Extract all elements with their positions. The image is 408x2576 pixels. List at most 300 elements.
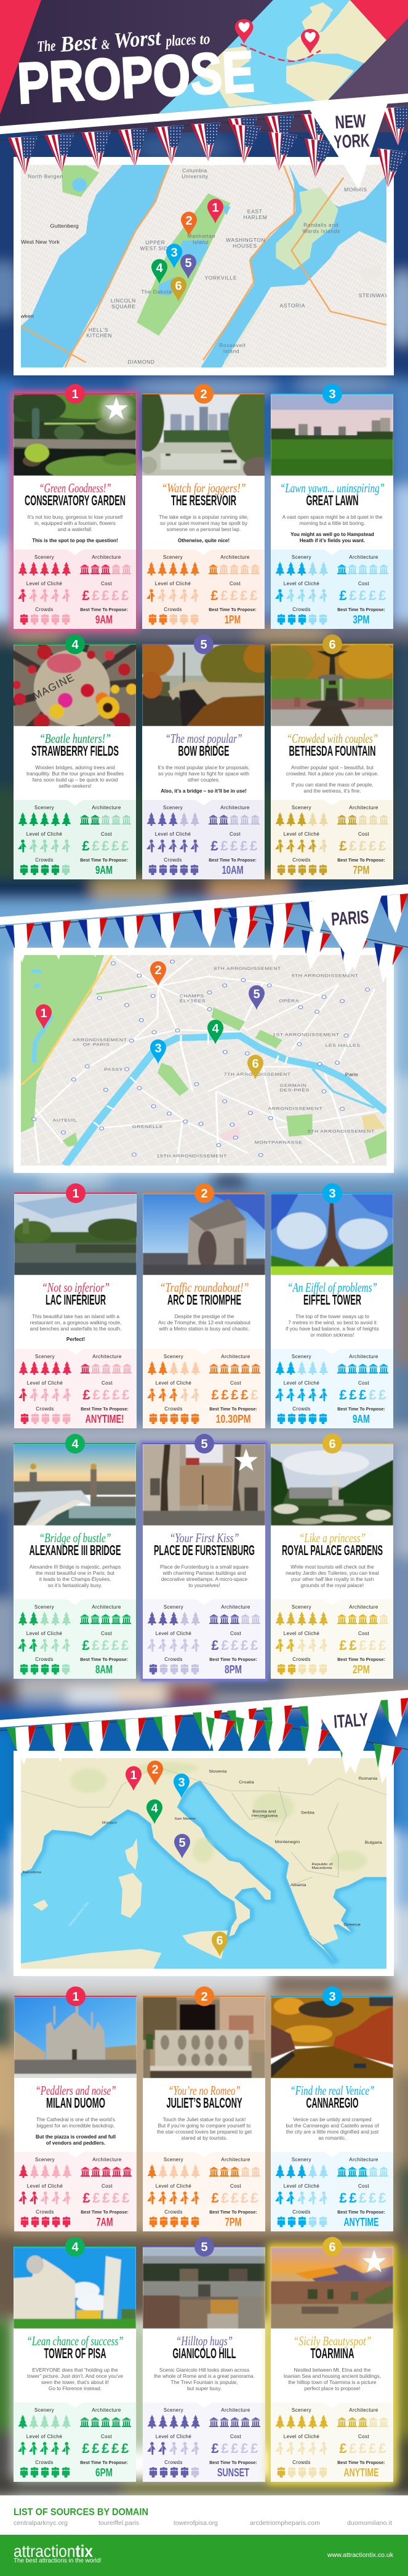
panel: new york map: Wards Islands [302,229,340,234]
badge 2: 2 [200,388,207,401]
stats panel: Cost [358,2183,369,2189]
stats panel: Cost [102,1380,113,1386]
stats panel: Crowds [36,2209,54,2215]
stats panel [142,550,265,629]
description: Ioanian Sea and housing ancient buildings, [284,2373,381,2379]
title: The [37,38,56,55]
stats panel: £££££ [210,588,260,603]
description: and the wetness, it’s fine. [303,788,361,794]
name: BOW BRIDGE [178,743,229,759]
stats panel: £££££ [339,588,388,603]
description: tower” picture. Just don’t. And once you’ve [27,2373,123,2379]
photo: juliets balcony [143,1997,265,2078]
highlight glow: new york card 1 [11,391,138,631]
description: Another popular spot – beautiful, but [291,764,374,770]
description: Go to Florence instead. [49,2385,102,2391]
stats panel: Crowds [292,1406,311,1412]
new york map pins: 3 [170,246,178,260]
stats panel: Best Time To Propose: [209,2460,257,2465]
title: PROPOSE [16,39,256,116]
stats panel: Cost [230,831,241,837]
panel: new york map: WASHINGTON [226,238,265,243]
description: in, equipped with a fountain, flowers [34,520,116,526]
panel: new york map: Roosevelt [219,343,246,348]
panel: new york map: Columbia [182,168,207,174]
quote: “Like a princess” [299,1530,366,1545]
header banner [0,0,408,132]
description: grounds of the royal palace! [301,1582,364,1588]
badge 2 [194,384,214,404]
name: STRAWBERRY FIELDS [31,743,119,759]
badge 5 [194,1434,214,1454]
highlight glow: paris card 5 [140,1441,268,1681]
stats panel: Best Time To Propose: [209,1657,257,1662]
stats panel: Best Time To Propose: [80,857,128,863]
italy map pins: 2 [151,1763,159,1777]
stats panel: Architecture [221,2407,250,2413]
description: fans soon build up – be quick to avoid [33,777,118,783]
stats panel: Best Time To Propose: [80,607,128,612]
stats panel [271,2152,393,2231]
panel: paris map: CHAMPS [180,994,204,998]
description: biggest for an incredible backdrop. [37,2122,114,2129]
name: ARC DE TRIOMPHE [167,1292,241,1308]
stats panel: Cost [101,581,112,586]
stats panel: Cost [230,581,241,586]
description: perfect place to propose! [304,2385,361,2391]
name: JULIET’S BALCONY [166,2095,242,2111]
quote: “An Eiffel of problems” [287,1280,377,1295]
pennant: italy: ITALY [333,1710,369,1732]
description: Venice can be untidy and cramped [293,2116,372,2122]
stats panel: Best Time To Propose: [337,2209,385,2215]
name: GREAT LAWN [306,492,358,508]
description: the hilltop town of Toarmina is a picture [288,2379,377,2385]
pennant: new york: YORK [334,130,370,153]
description: but super busy. [187,2385,222,2391]
stats panel: Architecture [221,1604,250,1610]
photo: gianicolo hill [143,2247,265,2329]
stats panel [271,800,393,879]
stats panel: £££££ [82,1638,131,1653]
stats panel: Scenery [34,2407,54,2413]
badge 1: 1 [72,1990,79,2004]
stats panel: £££££ [82,838,131,854]
name: MILAN DUOMO [46,2095,105,2111]
sources panel: LIST OF SOURCES BY DOMAIN [14,2507,148,2518]
stats panel: Architecture [92,1354,122,1359]
description: morning but a little bit boring. [300,520,365,526]
description: restaurant on, a gorgeous walking route, [30,1319,121,1326]
quote: “Lean chance of success” [27,2334,123,2348]
card: Gianicolo Hill [143,2237,265,2482]
panel: italy map: Monaco [102,1821,118,1825]
card: Bow Bridge [132,634,274,879]
paris map pins: 1 [40,1007,47,1020]
photo: toarmina [271,2247,393,2329]
stats panel: Crowds [164,857,182,863]
stats panel: Architecture [92,2407,121,2413]
description: Alexandre III Bridge is majestic, perhaps [30,1564,121,1570]
stats panel: Cost [230,2434,241,2439]
badge 3 [322,1986,342,2006]
description: seen the tower, that’s about it! [41,2379,109,2385]
stats panel: Best Time To Propose: [81,2209,129,2215]
stats panel: 9AM [95,614,113,626]
description: the star-crossed lovers be prepared to get [157,2129,252,2135]
stats panel [271,1599,393,1679]
stats panel [143,2402,265,2482]
new york map pins: 5 [185,257,192,270]
panel: italy map [14,1751,394,1976]
panel: new york map: Island [193,240,209,245]
italy map pins: 6 [216,1934,223,1948]
photo: reservoir [142,394,265,476]
stats panel: Scenery [35,2157,55,2162]
description: so it’s fantastically busy. [48,1582,102,1588]
paris map pins: 4 [212,1022,219,1036]
quote: “Sicily Beautyspot” [293,2334,372,2348]
stats panel [143,1599,265,1679]
badge 4 [65,2237,85,2257]
stats panel: ANYTIME [343,2466,379,2479]
badge 4 [65,1434,85,1454]
stats panel: Level of Cliché [284,581,319,586]
photo: bethesda fountain [271,645,393,726]
name: THE RESERVOIR [171,492,236,508]
description: If you can stand the mass of people, [291,782,374,788]
description: You might as well go to Hampstead [290,532,374,537]
description: The Cathedral is one of the world’s [36,2116,115,2122]
description: Arc de Triomphe, this 12-exit roundabout [158,1319,251,1326]
stats panel: Scenery [164,2407,183,2413]
badge 3 [322,384,342,404]
italy map pins: 5 [178,1836,186,1850]
description: or motion sickness! [310,1332,354,1338]
quote: “Green Goodness!” [39,481,111,495]
panel: paris map: 1ST ARRONDISSEMENT [273,1032,340,1037]
new york map pins: 2 [185,214,193,228]
new york map pins: 1 [212,201,219,215]
badge 5: 5 [201,2241,208,2254]
card: Bethesda Fountain [265,634,400,879]
photo: milan duomo [14,1997,137,2078]
panel: italy map: Romania [359,1777,377,1781]
stats panel: Crowds [292,2460,311,2465]
stats panel: Crowds [164,1406,183,1412]
panel: new york map: Guttenberg [50,223,79,229]
stats panel: Level of Cliché [27,2183,63,2189]
sources panel: towerofpisa.org [174,2519,218,2527]
description: of vendors and peddlers. [46,2140,105,2146]
photo: alexandre iii bridge [14,1444,136,1526]
stats panel: Level of Cliché [284,1380,319,1386]
photo: tower of pisa [14,2247,136,2329]
stats panel: Architecture [349,805,378,810]
title: Best [59,30,98,57]
stats panel: Best Time To Propose: [209,857,257,863]
stats panel: Crowds [164,2460,183,2465]
description: decorative streetlamps. A micro-space [161,1576,247,1582]
description: your other half like royalty in the lush [291,1576,374,1582]
stats panel [271,550,393,629]
badge 3: 3 [329,1187,336,1201]
name: ALEXANDRE III BRIDGE [30,1542,121,1558]
title: to [199,31,210,48]
description: Place de Furstenburg is a small square [160,1564,249,1570]
card: Conservatory Garden [10,384,143,629]
stats panel: Crowds [35,2460,54,2465]
description: as romantic. [318,2135,346,2141]
panel: paris map: 8TH ARRONDISSEMENT [214,966,281,971]
pennant: paris [312,894,382,970]
stats panel: Crowds [292,1657,311,1662]
stats panel: £££££ [211,2190,260,2206]
card: Strawberry Fields [7,634,143,879]
stats panel: 8PM [225,1663,242,1676]
description: Scenic Gianicolo Hill looks down across [159,2367,249,2373]
pennant: new york [310,103,388,190]
panel: new york map: University [182,174,209,179]
quote: “Bridge of bustle” [39,1530,111,1545]
description: if you have bad balance, a fear of heights [286,1326,379,1332]
name: PLACE DE FURSTENBURG [154,1542,255,1558]
card: Tower of Pisa [14,2237,136,2482]
description: tranquillity. But the tour groups and Beatles [26,770,124,777]
description: Also, it’s a bridge – so it’ll be in use! [161,788,247,794]
stats panel: 7PM [353,864,369,876]
badge 4: 4 [71,2241,79,2254]
white ribbon: paris [0,884,408,925]
pennant: italy [312,1697,382,1774]
panel: new york map: UPPER [145,240,165,246]
stats panel: £££££ [339,1387,388,1402]
stats panel: Architecture [220,554,250,560]
stats panel: Scenery [292,1354,311,1359]
stats panel: Level of Cliché [156,1380,191,1386]
description: The Trevi Fountain is popular, [170,2379,238,2385]
panel: paris map: GRENELLE [132,1124,163,1129]
stats panel: ANYTIME! [85,1413,124,1425]
stats panel: SUNSET [217,2466,249,2479]
stats panel: Architecture [349,554,378,560]
description: Perfect! [66,1337,85,1342]
panel: paris map: DES-PRÉS [280,1087,310,1092]
stats panel: Level of Cliché [26,1631,62,1636]
panel: new york map: LINCOLN [111,298,136,303]
stats panel: Scenery [34,1604,54,1610]
description: Heath if it’s fields you want. [300,538,365,543]
panel: paris map: GERMAIN [280,1083,307,1088]
highlight glow: italy card 6 [268,2244,396,2485]
stats panel: 9AM [95,864,113,876]
panel: new york map: YORKVILLE [204,276,237,281]
badge 1 [65,384,85,404]
badge 2: 2 [201,1990,208,2004]
quote: “Watch for joggers!” [161,481,246,495]
description: with charming Parisian buildings and [162,1570,246,1576]
badge 1: 1 [72,1187,79,1201]
card: Eiffel Tower [271,1183,393,1428]
panel: italy map: Republic of [312,1862,333,1866]
stats panel: Architecture [349,1604,378,1610]
stats panel: Crowds [35,607,54,612]
paris map pins: 3 [154,1042,162,1055]
description: The top of the tower sways up to [295,1313,369,1319]
panel: new york map: STEINWAY [359,293,388,298]
card: Cannaregio [271,1986,393,2231]
badge 5 [194,634,214,654]
stats panel: Scenery [34,805,54,810]
badge 4: 4 [71,1438,79,1451]
description: selfie-seekers! [58,783,92,789]
card: Milan Duomo [14,1986,137,2231]
description: and a waterfall. [58,526,92,532]
photo: eiffel tower [271,1194,393,1275]
panel: new york map: Randalls and [303,223,338,228]
stats panel: 3PM [353,614,369,626]
stats panel: Best Time To Propose: [337,857,385,863]
description: A vast open space might be a bit quiet in the [282,514,383,520]
paris map pins [36,961,265,1079]
title: places [164,31,196,50]
panel: new york map: KITCHEN [87,333,112,338]
pennant: paris: PARIS [330,907,369,930]
name: TOWER OF PISA [44,2345,106,2361]
stats panel: 8AM [95,1663,113,1676]
panel: italy map: Montenegro [275,1841,300,1844]
stats panel [14,2402,136,2482]
name: LAC INFÉRIEUR [46,1291,106,1308]
stats panel: Cost [358,831,369,837]
photo: strawberry fields: IMAGINE [28,671,76,704]
stats panel: Cost [102,2183,113,2189]
photo: place de furstenburg [143,1444,265,1526]
stats panel: Scenery [163,554,183,560]
stats panel: Crowds [164,607,182,612]
stats panel: Scenery [292,1604,311,1610]
badge 3: 3 [329,388,336,401]
stats panel: Level of Cliché [26,2434,62,2439]
card: Juliet's Balcony [143,1986,265,2231]
stats panel: Best Time To Propose: [209,607,257,612]
panel: new york map: ASTORIA [280,303,305,308]
stats panel: Cost [101,831,112,837]
card: Lac Inférieur [14,1183,143,1428]
stats panel [271,2402,393,2482]
description: While most tourists will check out the [290,1564,374,1570]
panel: new york map: DIAMOND [127,359,155,365]
description: This beautiful lake has an island with a [32,1313,119,1319]
panel: paris map: 15TH ARRONDISSEMENT [157,1153,227,1158]
panel: new york map: HOUSES [233,244,257,249]
description: It’s not too busy, gorgeous to lose yourself [28,514,123,520]
photo: bow bridge [142,645,265,726]
panel: italy map: Albania [290,1883,306,1887]
stats panel: Architecture [220,805,250,810]
stats panel: Level of Cliché [155,831,191,837]
quote: “Traffic roundabout!” [160,1280,249,1295]
panel: paris map: OPÉRA [279,998,300,1003]
panel: new york map: EAST [247,209,262,215]
panel: italy map: Croatia [239,1781,254,1785]
stats panel: £££££ [211,2441,260,2456]
description: It’s the most popular place for proposals, [158,764,250,770]
stats panel: Scenery [164,1354,183,1359]
stats panel: Best Time To Propose: [337,2460,385,2465]
panel: italy map: San Marino [174,1817,196,1821]
badge 6 [322,634,342,654]
description: the most beautiful one in Paris, but [36,1570,115,1576]
quote: “You’re no Romeo” [169,2083,240,2098]
stats panel: Level of Cliché [156,1631,191,1636]
panel: paris map: ÉLYSÉES [180,998,206,1003]
stats panel: Best Time To Propose: [337,1657,385,1662]
stats panel: £££££ [210,838,260,854]
panel: new york map: The Dakota [141,289,172,295]
stats panel: Crowds [292,2209,311,2215]
stats panel: Scenery [292,2157,311,2162]
stats panel: Scenery [292,2407,311,2413]
panel: italy map: Greece [343,1922,361,1927]
panel: paris map: AUTEUIL [53,1118,78,1122]
stats panel: Cost [358,581,369,586]
stats panel: £££££ [82,1387,132,1402]
stats panel: Architecture [349,1354,378,1359]
stats panel [271,1349,393,1428]
stats panel: Architecture [221,1354,250,1359]
panel: paris map: 7TH ARRONDISSEMENT [224,1072,291,1077]
card: Alexandre III Bridge [14,1434,136,1679]
stats panel: Best Time To Propose: [337,607,385,612]
stats panel: £££££ [339,2441,388,2456]
stats panel: 10.30PM [215,1413,251,1425]
panel: new york map: MORRIS [344,187,367,193]
stats panel: Architecture [92,1604,121,1610]
description: Despite the prestige of the [175,1313,234,1319]
stats panel: Architecture [349,2157,378,2162]
stats panel: Best Time To Propose: [337,1406,385,1412]
panel: new york map: West New York [21,239,60,245]
stats panel: Cost [101,2434,112,2439]
footer bar: www.attractiontix.co.uk [327,2551,394,2559]
card: Great Lawn [271,384,393,629]
stats panel: Level of Cliché [156,2183,191,2189]
name: GIANICOLO HILL [172,2345,236,2361]
stats panel: Level of Cliché [284,2434,319,2439]
stats panel: Best Time To Propose: [209,1406,257,1412]
italy map pins [126,1761,228,1956]
stats panel: Architecture [92,2157,122,2162]
sources panel: duomomilano.it [347,2519,392,2527]
stats panel: Cost [101,1631,112,1636]
stats panel: Scenery [164,2157,183,2162]
stats panel [14,800,136,879]
badge 6: 6 [329,638,336,652]
description: stared at by tourists. [182,2135,227,2141]
badge 4: 4 [71,638,79,652]
stats panel: Crowds [36,1406,54,1412]
description: the whole of Rome and is a great panorama. [154,2373,255,2379]
badge 6 [322,1434,342,1454]
description: This is the spot to pop the question! [32,538,118,543]
new york map pins [151,199,223,302]
description: Wooden bridges, adoring trees and [35,764,115,770]
name: TOARMINA [310,2345,354,2361]
badge 6: 6 [329,1438,336,1451]
panel: new york map: HELL'S [89,327,108,333]
stats panel: 7AM [96,2216,113,2228]
